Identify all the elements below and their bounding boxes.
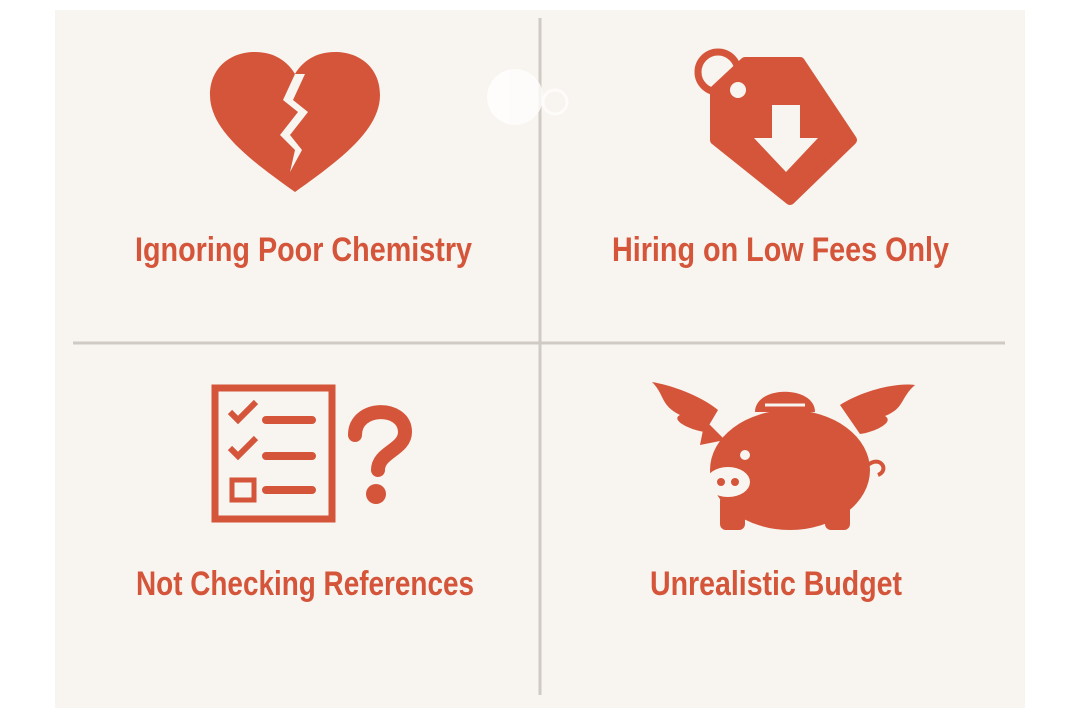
icon: price tag down arrow <box>698 52 852 200</box>
heading: Ignoring Poor Chemistry: Ignoring Poor Chemistry <box>135 231 472 269</box>
heading: Hiring on Low Fees Only: Hiring on Low Fees Only <box>612 231 949 269</box>
heading: Unrealistic Budget: Unrealistic Budget <box>650 565 902 603</box>
icon: broken heart <box>210 52 380 192</box>
icon: checklist with question mark <box>215 388 405 519</box>
icon: flying piggy bank <box>652 382 915 530</box>
watermark logo <box>487 69 567 125</box>
heading: Not Checking References: Not Checking References <box>136 565 474 603</box>
